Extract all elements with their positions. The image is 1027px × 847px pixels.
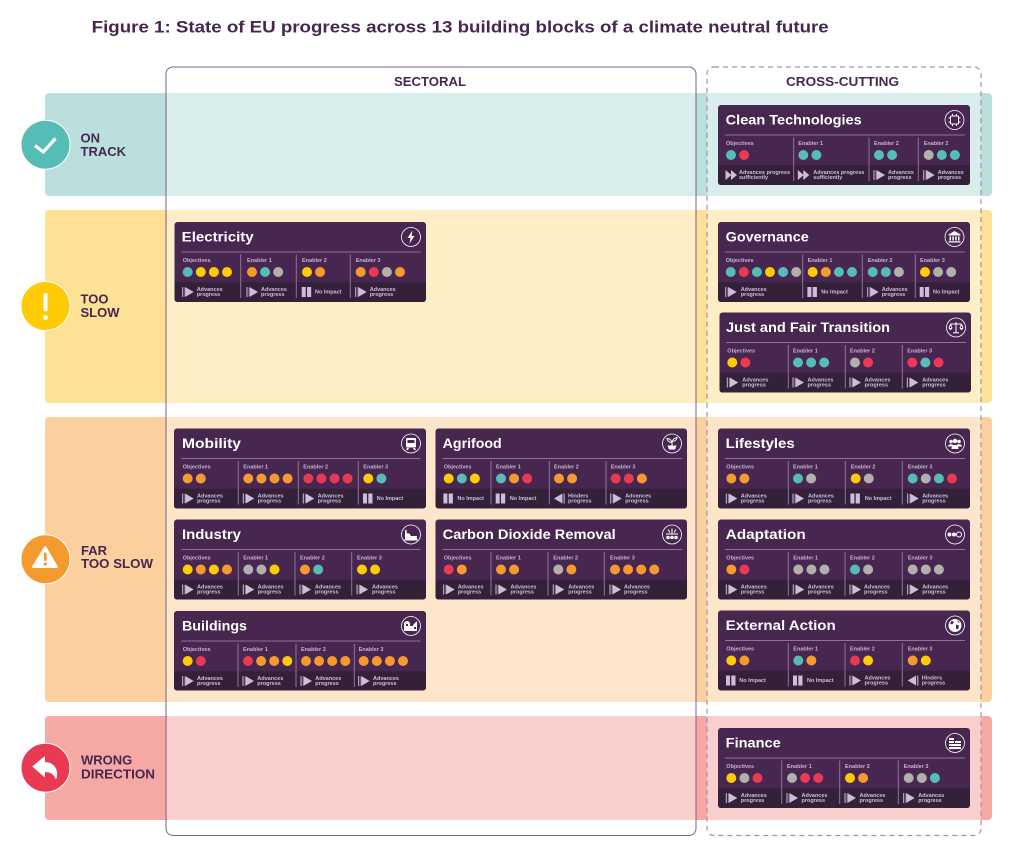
column: Enabler 3: Advances <box>624 584 650 590</box>
column: Enabler 3: Enabler 3 <box>908 464 932 470</box>
column: Enabler 3: Enabler 3 <box>908 556 932 562</box>
card title: Governance: Governance <box>726 229 809 245</box>
column: Objectives: Advances <box>741 584 767 590</box>
column: Enabler 1: Enabler 1 <box>247 258 272 264</box>
panel: cross-cutting column <box>707 67 981 836</box>
column: Enabler 1: Enabler 1 <box>793 646 818 652</box>
column: Enabler 3: progress <box>922 382 946 388</box>
column: Enabler 1: Advances <box>808 584 834 590</box>
column: Enabler 3: Advances <box>370 287 396 293</box>
column: Objectives: progress <box>741 292 764 298</box>
column: Enabler 2 <box>303 464 353 504</box>
column: Enabler 2 <box>844 764 886 804</box>
column: Enabler 1: Advances <box>258 494 284 500</box>
column: Enabler 3 <box>907 556 948 596</box>
column: Enabler 1: progress <box>258 590 281 596</box>
column: Enabler 3: Enabler 3 <box>610 556 635 562</box>
card: Just and Fair Transition <box>720 312 971 392</box>
band: wrong direction <box>45 716 992 820</box>
band: on track <box>45 93 992 196</box>
column: Enabler 2 <box>850 556 890 596</box>
column: Enabler 2: Advances <box>315 676 341 682</box>
column: Objectives: Advances <box>741 287 767 293</box>
column: Enabler 1: Enabler 1 <box>787 764 812 770</box>
card title: Finance: Finance <box>726 735 781 751</box>
column: Enabler 1 <box>243 556 284 596</box>
column: Enabler 2: Enabler 2 <box>850 348 875 354</box>
column: Enabler 3: progress <box>373 681 397 687</box>
column: Enabler 2: Enabler 2 <box>851 464 875 470</box>
card title: External Action: External Action <box>726 617 836 633</box>
card title: Carbon Dioxide Removal: Carbon Dioxide Removal <box>443 526 616 542</box>
column: Enabler 1: Enabler 1 <box>793 464 818 470</box>
column: Enabler 1: Advances <box>258 584 284 590</box>
column: Enabler 1: Enabler 1 <box>793 348 818 354</box>
column: Enabler 1: progress <box>802 798 825 804</box>
column: Enabler 3 <box>610 464 651 504</box>
column: Enabler 3: progress <box>372 590 396 596</box>
column: Enabler 3: Advances <box>918 793 944 799</box>
column: Objectives: progress <box>741 590 764 596</box>
card title: Mobility: Mobility <box>182 435 241 451</box>
column: Objectives <box>182 647 223 687</box>
column: Enabler 3: progress <box>922 498 946 504</box>
column: Enabler 2 <box>867 258 908 298</box>
column: Enabler 3 <box>363 464 403 504</box>
column: Enabler 1 <box>496 556 536 596</box>
column: Enabler 3: Advances <box>922 378 948 384</box>
column: Enabler 1: Advances progress <box>813 170 864 176</box>
column: Enabler 1 <box>807 258 857 297</box>
icon: plant <box>662 434 682 453</box>
column: Enabler 3: Enabler 3 <box>907 348 932 354</box>
column: Enabler 2 <box>553 556 594 596</box>
column: Objectives: Objectives <box>444 464 472 470</box>
card title: Agrifood: Agrifood <box>443 435 502 451</box>
column: Enabler 1: progress <box>808 590 831 596</box>
column: Enabler 1 <box>246 258 287 298</box>
column: Enabler 1: Advances <box>261 287 287 293</box>
column: Objectives: progress <box>197 498 221 504</box>
column: Enabler 3 <box>908 646 945 686</box>
column: Enabler 1: Enabler 1 <box>243 647 268 653</box>
column: Enabler 2: Enabler 2 <box>845 764 870 770</box>
column: Objectives: Objectives <box>726 764 754 770</box>
icon: buildings <box>402 616 420 636</box>
column: Enabler 2: progress <box>860 798 883 804</box>
card title: Just and Fair Transition: Just and Fair Transition <box>726 319 890 335</box>
icon: globe <box>946 616 964 635</box>
column: Objectives: progress <box>458 590 481 596</box>
column: Enabler 3: Enabler 3 <box>611 464 635 470</box>
column: Enabler 2: Advances <box>864 584 890 590</box>
column: Enabler 3: Hinders <box>922 676 942 682</box>
column: Objectives: Objectives <box>183 556 211 562</box>
column: Enabler 1 <box>496 464 536 504</box>
column: Objectives: sufficiently <box>739 175 769 181</box>
card: Carbon Dioxide Removal <box>436 520 687 600</box>
column: Enabler 2: Advances <box>888 170 914 176</box>
column: Enabler 3 <box>907 464 957 504</box>
column: Enabler 2: Enabler 2 <box>868 258 892 264</box>
card title: Clean Technologies: Clean Technologies <box>726 112 862 128</box>
column: Objectives: Objectives <box>183 258 211 264</box>
icon: carbon removal <box>662 525 682 544</box>
column: Enabler 1 <box>793 646 834 686</box>
title: Figure 1: State of EU progress across 13 building blocks of a climate neutral future <box>92 18 829 37</box>
column: Objectives: Advances <box>742 378 768 384</box>
card title: Adaptation: Adaptation <box>726 526 806 542</box>
card: External Action <box>718 610 970 690</box>
column: Enabler 3 <box>358 647 408 687</box>
column: Objectives <box>443 556 484 596</box>
column: Enabler 3 <box>355 258 405 298</box>
column: Enabler 3 <box>356 556 398 596</box>
column: Enabler 2 <box>554 464 592 504</box>
column: Objectives: Objectives <box>444 556 472 562</box>
column: Enabler 2: Enabler 2 <box>300 556 325 562</box>
column: Enabler 2: Advances <box>864 378 890 384</box>
column: Enabler 2 <box>302 258 342 297</box>
column: Enabler 1: No Impact <box>821 290 848 296</box>
column: Objectives: progress <box>197 292 220 298</box>
column: Objectives: progress <box>197 681 221 687</box>
column: Enabler 1: Enabler 1 <box>808 258 832 264</box>
column: Objectives <box>182 258 232 298</box>
card: Agrifood <box>436 428 687 508</box>
status: far too slow: TOO SLOW <box>81 556 154 571</box>
column: Enabler 2: progress <box>864 680 888 686</box>
card: Finance <box>718 728 970 808</box>
card: Clean Technologies <box>718 105 970 185</box>
card: Electricity <box>174 222 426 302</box>
column: Enabler 2: Enabler 2 <box>850 646 875 652</box>
column: Enabler 1 <box>786 764 828 804</box>
column: Enabler 2: progress <box>864 382 888 388</box>
column: Objectives: Advances <box>197 676 223 682</box>
column: Enabler 1: progress <box>257 681 281 687</box>
column: Objectives: Advances progress <box>739 170 790 176</box>
column: Enabler 2: progress <box>882 292 905 298</box>
column: Enabler 3: Enabler 3 <box>359 647 383 653</box>
column: Enabler 2: progress <box>315 681 339 687</box>
column: Enabler 1: progress <box>808 498 832 504</box>
column: Enabler 2: progress <box>888 175 912 181</box>
column: Objectives <box>443 464 484 504</box>
card title: Buildings: Buildings <box>182 618 247 634</box>
column: Enabler 1: progress <box>258 498 281 504</box>
column: Enabler 1 <box>243 464 293 504</box>
panel: sectoral column <box>166 67 696 836</box>
column: Enabler 2: progress <box>568 498 592 504</box>
column: Enabler 3: Advances <box>372 584 398 590</box>
column: Enabler 2: Hinders <box>568 494 588 500</box>
column: Enabler 2: Advances <box>315 584 341 590</box>
card: Industry <box>174 520 426 600</box>
column: Enabler 3: Enabler 3 <box>356 258 380 264</box>
column: Enabler 2 (second): progress <box>938 175 961 181</box>
column: Objectives: progress <box>741 498 764 504</box>
card: Lifestyles <box>718 428 970 508</box>
card title: Industry: Industry <box>182 526 241 542</box>
column: Objectives: progress <box>742 382 766 388</box>
column: Enabler 2 <box>300 647 350 687</box>
card: Buildings <box>174 611 426 690</box>
card title: Electricity: Electricity <box>182 229 254 245</box>
column: Enabler 1 <box>793 556 834 596</box>
column: Objectives: Objectives <box>726 556 754 562</box>
column: Enabler 2: Enabler 2 <box>301 647 326 653</box>
column: Enabler 3: Advances <box>922 584 948 590</box>
column: Enabler 1 <box>242 647 292 687</box>
column: Enabler 1 <box>792 348 834 388</box>
column: Enabler 1 <box>798 141 864 181</box>
column: Objectives: Objectives <box>726 141 754 147</box>
column: Enabler 3: progress <box>922 590 946 596</box>
status: too slow: TOO <box>80 292 108 307</box>
column: Objectives: Objectives <box>183 464 211 470</box>
status: on track <box>21 120 127 169</box>
column: Enabler 3: progress <box>922 680 945 686</box>
status: far too slow <box>21 535 154 584</box>
heading: sectoral: SECTORAL <box>394 75 466 89</box>
card title: Lifestyles: Lifestyles <box>726 435 795 451</box>
column: Enabler 1 <box>792 464 834 504</box>
column: Enabler 2: Enabler 2 <box>850 556 875 562</box>
column: Objectives: Objectives <box>726 258 754 264</box>
column: Enabler 1: Enabler 1 <box>793 556 818 562</box>
column: Enabler 2 (second) <box>923 141 964 181</box>
heading: cross-cutting: CROSS-CUTTING <box>786 75 899 89</box>
column: Objectives: progress <box>197 590 221 596</box>
column: Enabler 2: progress <box>318 498 341 504</box>
column: Enabler 3: progress <box>624 590 648 596</box>
column: Enabler 1: progress <box>261 292 285 298</box>
icon: dots and ring <box>946 525 964 544</box>
column: Objectives: Advances <box>197 287 223 293</box>
column: Enabler 3: No Impact <box>377 496 403 502</box>
column: Objectives <box>727 348 768 388</box>
column: Objectives: Objectives <box>183 647 211 653</box>
icon: lightning bolt <box>402 228 420 246</box>
column: Enabler 2: Advances <box>882 287 908 293</box>
column: Objectives: Objectives <box>726 464 754 470</box>
column: Objectives: Advances <box>197 584 223 590</box>
column: Enabler 2: Enabler 2 <box>553 556 578 562</box>
card: Adaptation <box>718 520 970 600</box>
column: Enabler 1: Advances <box>510 584 536 590</box>
column: Enabler 2: progress <box>568 590 592 596</box>
column: Enabler 1: Enabler 1 <box>798 141 823 147</box>
column: Enabler 3 <box>920 258 960 297</box>
icon: people <box>946 434 964 453</box>
column: Objectives: Objectives <box>727 348 755 354</box>
column: Enabler 2: Enabler 2 <box>303 464 328 470</box>
column: Enabler 2: Advances <box>860 793 886 799</box>
column: Enabler 2 <box>850 348 890 388</box>
column: Enabler 1: progress <box>808 382 831 388</box>
column: Enabler 3: No Impact <box>933 290 960 296</box>
status: wrong direction: WRONG <box>81 753 132 768</box>
column: Enabler 2 (second): Advances <box>938 170 964 176</box>
column: Enabler 3: Enabler 3 <box>363 464 388 470</box>
column: Enabler 3: Enabler 3 <box>908 646 932 652</box>
column: Enabler 3 <box>903 764 944 804</box>
column: Enabler 2 (second): Enabler 2 <box>924 141 948 147</box>
column: Enabler 3: Enabler 3 <box>920 258 945 264</box>
column: Objectives <box>726 141 790 181</box>
column: Objectives <box>726 556 767 596</box>
icon: factory <box>402 525 420 544</box>
column: Enabler 2: progress <box>864 590 888 596</box>
icon: microchip <box>945 110 964 130</box>
column: Objectives: Advances <box>741 793 767 799</box>
status: wrong direction <box>21 743 155 792</box>
column: Objectives <box>725 258 801 298</box>
column: Enabler 2: Enabler 2 <box>554 464 579 470</box>
band: too slow <box>45 210 992 403</box>
column: Enabler 1: Advances <box>808 494 834 500</box>
column: Enabler 1: Advances <box>257 676 283 682</box>
column: Enabler 2 <box>850 464 891 504</box>
column: Objectives: Objectives <box>726 646 754 652</box>
column: Enabler 3: Advances <box>373 676 399 682</box>
band: far too slow <box>45 417 992 702</box>
column: Enabler 2 <box>850 646 890 686</box>
column: Enabler 1: Enabler 1 <box>243 464 268 470</box>
column: Objectives: Advances <box>197 494 223 500</box>
column: Enabler 2: No Impact <box>315 290 342 296</box>
icon: scales <box>946 318 966 337</box>
column: Objectives <box>726 646 766 686</box>
column: Objectives <box>182 556 232 596</box>
status: on track: ON <box>80 130 100 146</box>
column: Enabler 3 <box>907 348 948 388</box>
column: Enabler 2: Advances <box>568 584 594 590</box>
icon: coin stacks <box>946 734 964 752</box>
column: Enabler 1: progress <box>510 590 534 596</box>
icon: institution building <box>945 228 964 246</box>
status: too slow <box>21 282 120 330</box>
column: Enabler 1: No Impact <box>510 496 536 502</box>
card: Governance <box>718 222 970 302</box>
column: Enabler 1: Enabler 1 <box>243 556 268 562</box>
column: Enabler 2: Advances <box>318 494 344 500</box>
status: far too slow: FAR <box>81 543 108 558</box>
column: Enabler 2: No Impact <box>865 496 891 502</box>
icon: train <box>402 434 420 453</box>
column: Enabler 2: Enabler 2 <box>302 258 327 264</box>
column: Objectives: Advances <box>458 584 484 590</box>
column: Enabler 2 <box>874 141 914 181</box>
column: Enabler 3: progress <box>918 798 942 804</box>
column: Enabler 3: Advances <box>922 494 948 500</box>
column: Objectives: Advances <box>741 494 767 500</box>
column: Enabler 1: Enabler 1 <box>496 556 521 562</box>
column: Enabler 1: Advances <box>808 378 834 384</box>
status: too slow: SLOW <box>80 305 120 320</box>
column: Objectives <box>726 464 767 504</box>
status: on track: TRACK <box>80 144 127 159</box>
column: Objectives: progress <box>741 798 764 804</box>
column: Objectives <box>726 764 767 804</box>
status: wrong direction: DIRECTION <box>81 767 155 782</box>
column: Enabler 2 <box>300 556 341 596</box>
column: Enabler 1: No Impact <box>807 678 834 684</box>
column: Enabler 3 <box>610 556 659 596</box>
column: Enabler 3: progress <box>370 292 393 298</box>
column: Enabler 1: Advances <box>802 793 828 799</box>
column: Enabler 1: sufficiently <box>813 175 843 181</box>
column: Enabler 3: Enabler 3 <box>357 556 382 562</box>
column: Enabler 3: Enabler 3 <box>904 764 928 770</box>
column: Enabler 1: Enabler 1 <box>496 464 521 470</box>
card: Mobility <box>174 428 426 508</box>
column: Objectives: No Impact <box>739 678 766 684</box>
column: Enabler 2: progress <box>315 590 339 596</box>
column: Enabler 3: Advances <box>625 494 651 500</box>
column: Enabler 2: Enabler 2 <box>874 141 899 147</box>
column: Objectives: No Impact <box>457 496 484 502</box>
column: Enabler 3: progress <box>625 498 649 504</box>
column: Objectives <box>182 464 223 504</box>
column: Enabler 2: Advances <box>864 676 890 682</box>
